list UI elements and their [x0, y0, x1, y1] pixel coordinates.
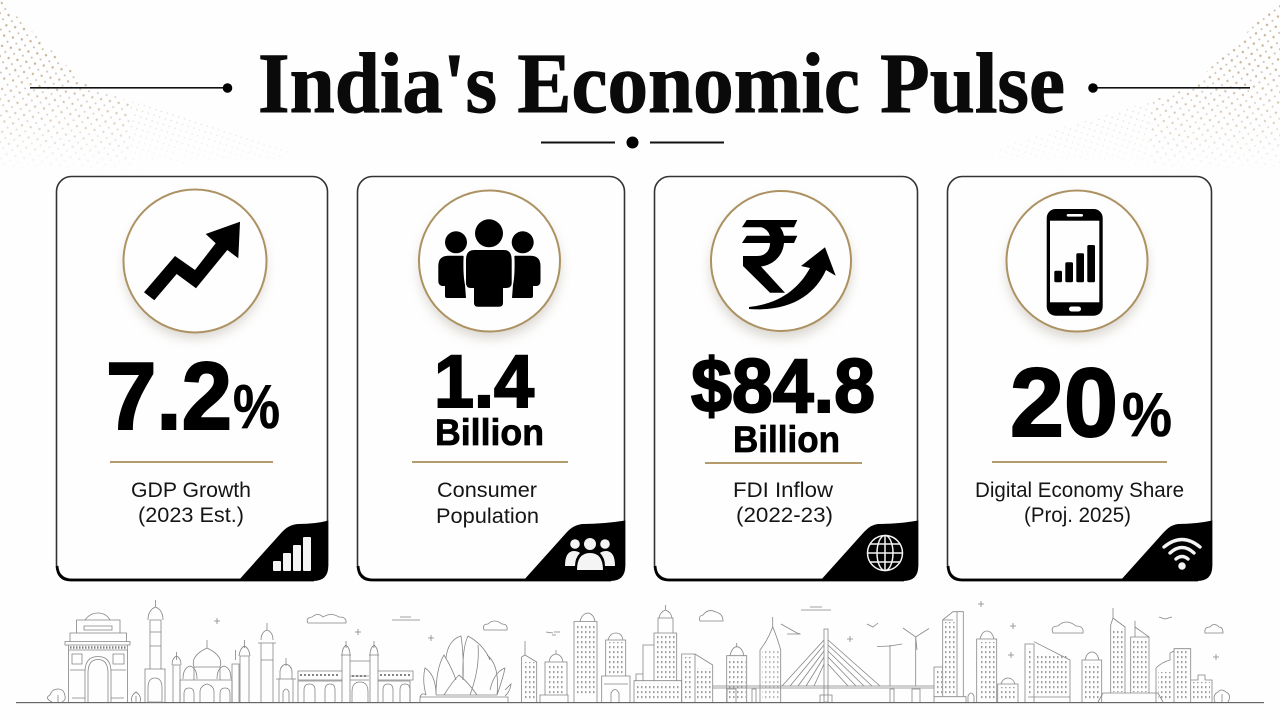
label: FDI Inflow: [733, 479, 834, 502]
trees: [47, 689, 1230, 702]
divider: [992, 461, 1167, 463]
landmark: Taj Mahal and minarets: [145, 600, 296, 702]
label: Consumer: [437, 479, 537, 502]
title: India's Economic Pulse: [258, 35, 1065, 131]
decorative dot wave: left: [0, 2, 288, 166]
title rule: left: [30, 83, 232, 93]
icon: people group: [419, 190, 560, 332]
value: 1.4: [434, 340, 534, 423]
landmark: Lotus Temple: [420, 636, 511, 702]
panel: consumer population: [358, 176, 625, 581]
corner tab: [820, 520, 918, 581]
decorative dot wave: right: [986, 5, 1280, 166]
ground line: [16, 702, 1264, 703]
value: $84.8: [691, 344, 875, 429]
icon circle shadow: [1007, 198, 1147, 338]
title rule: right: [1088, 83, 1250, 93]
wind turbines: [877, 628, 929, 686]
panel: FDI inflow: [654, 176, 918, 581]
icon circle shadow: [420, 198, 560, 338]
label: GDP Growth: [131, 479, 251, 502]
panel: digital economy share: [948, 176, 1212, 581]
corner tab: [1120, 520, 1212, 581]
clouds, birds and sparkles: [214, 601, 1223, 660]
icon: wifi: [1164, 540, 1200, 568]
icon: smartphone with bars: [1006, 190, 1148, 332]
divider: [705, 462, 862, 464]
divider: [110, 461, 273, 463]
buildings: right skyline: [934, 608, 1212, 702]
icon circle shadow: [125, 198, 265, 338]
value unit: Billion: [733, 419, 840, 460]
label detail: (Proj. 2025): [1024, 504, 1131, 527]
corner tab: [523, 520, 625, 581]
skyline illustration: [16, 600, 1264, 703]
icon: globe: [868, 536, 902, 570]
landmark: Red Fort arcade: [298, 641, 413, 702]
value unit: %: [233, 373, 280, 442]
icon: rising arrow: [124, 190, 266, 332]
landmark: India Gate: [65, 613, 130, 702]
divider: [412, 461, 568, 463]
value: 7.2: [106, 343, 232, 450]
icon: small people: [565, 538, 615, 570]
label detail: (2023 Est.): [138, 504, 244, 527]
corner tab: [238, 520, 328, 581]
buildings: central skyline: [522, 605, 781, 702]
label: Digital Economy Share: [975, 479, 1184, 502]
label detail: Population: [436, 505, 539, 528]
title sub-divider: [541, 136, 724, 148]
icon circle shadow: [711, 198, 851, 338]
label detail: (2022-23): [736, 504, 833, 527]
panel: GDP growth: [56, 176, 328, 581]
value unit: Billion: [435, 412, 544, 453]
cable-stayed bridge: [713, 629, 934, 702]
icon: signal bars: [273, 537, 311, 571]
value unit: %: [1122, 381, 1172, 450]
value: 20: [1010, 348, 1118, 457]
icon: rupee with arrow: [711, 191, 851, 331]
